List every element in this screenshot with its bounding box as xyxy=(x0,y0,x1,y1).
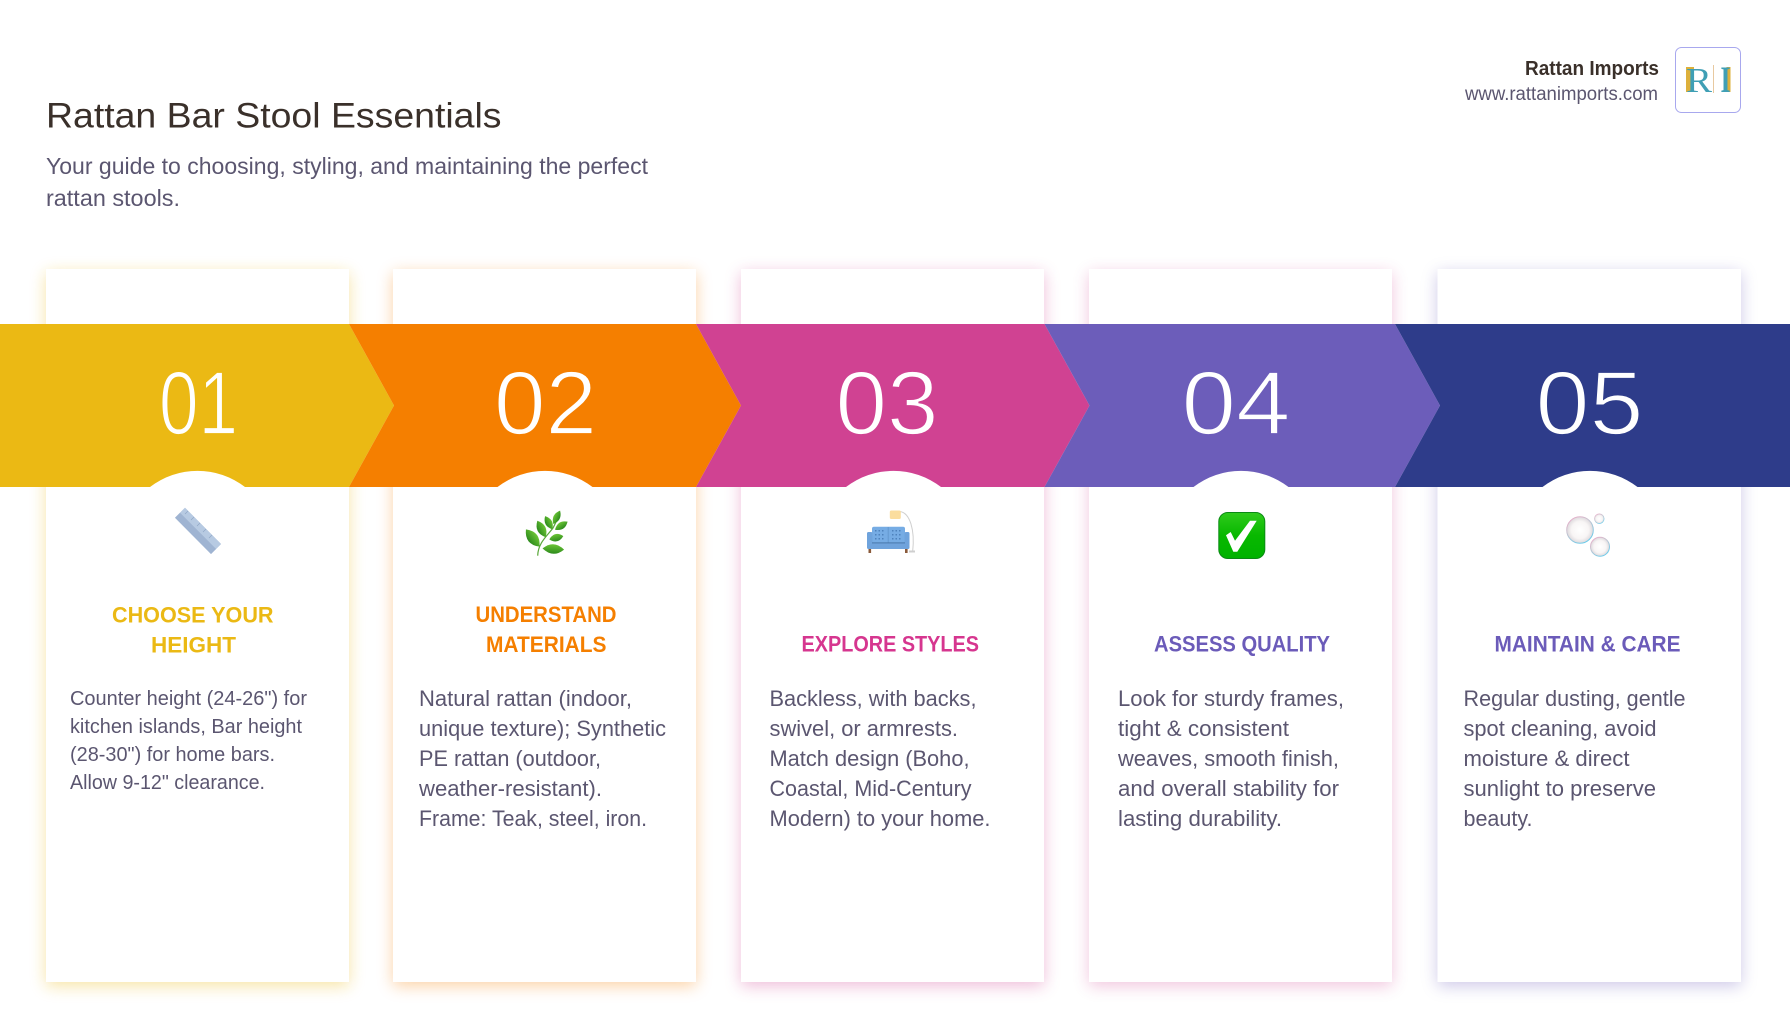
body text: weaves, smooth finish, xyxy=(1117,746,1339,771)
chevron 01 xyxy=(0,324,394,487)
subtitle: Your guide to choosing, styling, and maintaining the perfect xyxy=(46,153,649,179)
chevron 05 xyxy=(1395,324,1790,487)
brand name: Rattan Imports xyxy=(1525,58,1659,80)
logo: I xyxy=(1720,60,1730,101)
brand block xyxy=(1464,48,1740,112)
body text: swivel, or armrests. xyxy=(770,716,958,741)
body text xyxy=(1464,686,1686,831)
body text: Regular dusting, gentle xyxy=(1464,686,1686,711)
body text: Allow 9-12" clearance. xyxy=(70,772,265,794)
panel: maintain and care xyxy=(1438,269,1741,982)
body text: Frame: Teak, steel, iron. xyxy=(419,806,647,831)
heading: HEIGHT xyxy=(151,633,237,658)
icon: couch and lamp xyxy=(846,471,941,553)
chevron 05: 05 xyxy=(1536,354,1644,454)
body text: and overall stability for xyxy=(1118,776,1339,801)
body text: moisture & direct xyxy=(1464,746,1630,771)
body text: PE rattan (outdoor, xyxy=(419,746,601,771)
chevron 04: 04 xyxy=(1182,354,1290,454)
heading: MAINTAIN & CARE xyxy=(1494,632,1680,657)
body text: beauty. xyxy=(1464,806,1532,831)
body text: spot cleaning, avoid xyxy=(1464,716,1656,741)
card backgrounds with coloured glow xyxy=(46,269,1741,986)
body text: unique texture); Synthetic xyxy=(419,716,666,741)
body text: Match design (Boho, xyxy=(770,746,970,771)
logo: R xyxy=(1686,61,1713,100)
heading xyxy=(476,602,616,657)
body text: kitchen islands, Bar height xyxy=(70,716,302,738)
chevron 03: 03 xyxy=(836,354,938,454)
body text: Counter height (24-26") for xyxy=(70,688,307,710)
body text: Modern) to your home. xyxy=(770,806,990,831)
chevron 02: 02 xyxy=(494,354,597,454)
body text xyxy=(70,688,307,794)
subtitle: rattan stools. xyxy=(46,185,180,211)
logo xyxy=(1676,48,1740,112)
body text: (28-30") for home bars. xyxy=(70,744,275,766)
heading: MATERIALS xyxy=(486,632,606,657)
body text: Backless, with backs, xyxy=(770,686,976,711)
chevron 04 xyxy=(1044,324,1440,487)
body text: tight & consistent xyxy=(1118,716,1289,741)
body text: Look for sturdy frames, xyxy=(1118,686,1344,711)
heading: UNDERSTAND xyxy=(476,602,616,627)
chevron 02 xyxy=(349,324,741,487)
panel: explore styles xyxy=(741,269,1044,982)
body text: lasting durability. xyxy=(1118,806,1282,831)
icon: check mark xyxy=(1194,471,1288,558)
body text xyxy=(418,686,666,831)
brand url: www.rattanimports.com xyxy=(1464,84,1658,105)
body text: sunlight to preserve xyxy=(1464,776,1656,801)
heading: ASSESS QUALITY xyxy=(1154,632,1330,657)
chevron band xyxy=(0,324,1790,487)
heading xyxy=(112,603,274,658)
panel: choose your height xyxy=(46,269,349,982)
panel: assess quality xyxy=(1089,269,1392,982)
body text: Natural rattan (indoor, xyxy=(419,686,632,711)
icon: herb sprig xyxy=(498,471,592,556)
heading: CHOOSE YOUR xyxy=(112,603,274,628)
page title: Rattan Bar Stool Essentials xyxy=(46,96,502,136)
icon: bubbles xyxy=(1542,471,1638,556)
body text: Coastal, Mid-Century xyxy=(770,776,972,801)
body text: weather-resistant). xyxy=(418,776,602,801)
heading: EXPLORE STYLES xyxy=(802,632,979,657)
panel: understand materials xyxy=(393,269,696,982)
body text xyxy=(1117,686,1344,831)
body text xyxy=(770,686,990,831)
chevron 03 xyxy=(696,324,1090,487)
chevron 01: 01 xyxy=(159,354,238,454)
icon: ruler xyxy=(150,471,245,554)
subtitle xyxy=(46,153,649,211)
